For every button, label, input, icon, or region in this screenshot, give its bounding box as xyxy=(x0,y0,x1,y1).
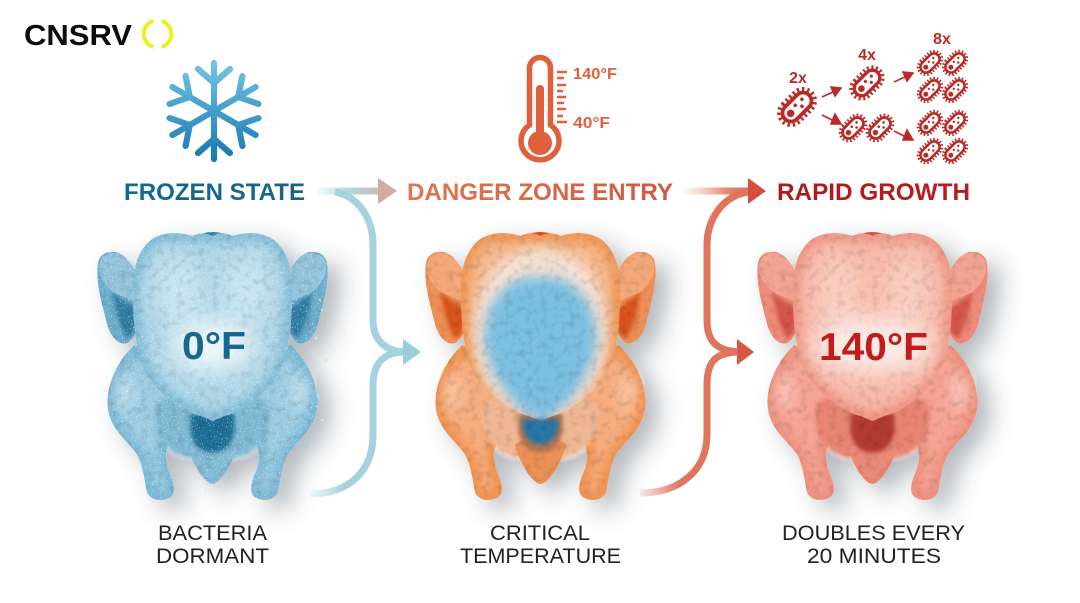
icon: snowflake xyxy=(170,63,258,159)
icon: thermometer: 140°F xyxy=(573,66,617,83)
arrow: frozen to danger, top xyxy=(318,178,397,204)
temperature: 0°F: 0°F xyxy=(182,325,246,368)
icon: thermometer xyxy=(521,58,617,160)
icon: bacteria multiplication: 4x xyxy=(858,47,876,64)
frozen chicken: glow behind temperature xyxy=(170,319,254,371)
raw chicken: glow behind temperature xyxy=(810,317,934,373)
caption: doubles every 20 minutes: DOUBLES EVERY xyxy=(782,522,965,545)
heading: danger zone entry: DANGER ZONE ENTRY xyxy=(407,179,673,206)
caption: critical temperature: TEMPERATURE xyxy=(460,545,621,568)
logo: CNSRV: CNSRV xyxy=(24,20,133,52)
caption: bacteria dormant: DORMANT xyxy=(156,545,269,568)
caption: critical temperature: CRITICAL xyxy=(490,522,590,545)
chicken: rapid growth xyxy=(757,232,988,500)
danger chicken: thawing blue core xyxy=(472,247,608,423)
caption: critical temperature xyxy=(460,522,621,568)
caption: bacteria dormant: BACTERIA xyxy=(158,522,267,545)
arrow: danger merge to growth chicken xyxy=(640,192,754,493)
frost speckles xyxy=(194,299,331,491)
arrow: danger to growth, top xyxy=(683,178,766,204)
caption: bacteria dormant xyxy=(156,522,269,568)
temperature: 140°F: 140°F xyxy=(819,326,928,369)
caption: doubles every 20 minutes: 20 MINUTES xyxy=(807,545,941,568)
arrow: frozen merge to danger chicken xyxy=(310,192,421,494)
icon: bacteria multiplication xyxy=(775,31,970,166)
heading: rapid growth: RAPID GROWTH xyxy=(777,179,970,206)
chicken: danger zone xyxy=(425,232,656,500)
icon: bacteria multiplication: 8x xyxy=(933,31,951,48)
logo: CNSRV xyxy=(24,20,171,52)
icon: thermometer: 40°F xyxy=(573,115,610,132)
chicken: frozen xyxy=(97,232,328,500)
heading: frozen state: FROZEN STATE xyxy=(124,179,305,206)
icon: bacteria multiplication: 2x xyxy=(789,70,807,87)
caption: doubles every 20 minutes xyxy=(782,522,965,568)
